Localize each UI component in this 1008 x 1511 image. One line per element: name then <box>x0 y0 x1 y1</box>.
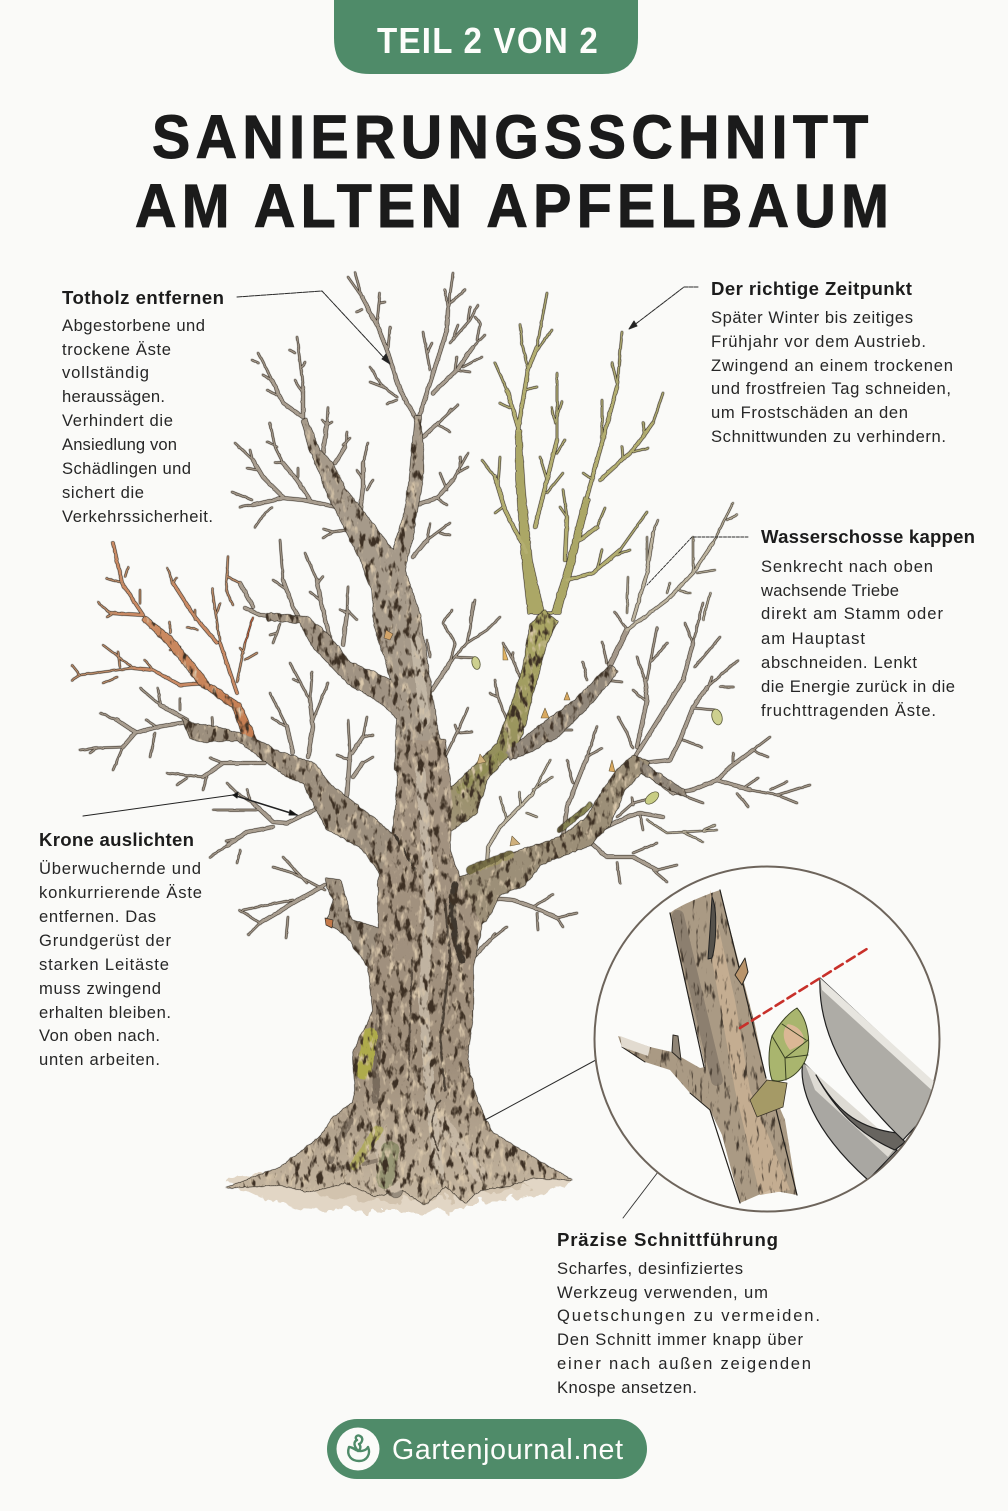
callout: Totholz entfernen: heraussägen. <box>62 387 165 406</box>
inset circle: precise cut detail <box>594 866 945 1212</box>
title <box>135 102 889 240</box>
callout: Wasserschosse kappen: abschneiden. Lenkt <box>761 653 917 672</box>
trunk highlights and crevices <box>330 640 590 1190</box>
callout: Krone auslichten: Überwuchernde und <box>39 859 201 878</box>
leader line: inset to trunk <box>485 1047 620 1120</box>
callout: Der richtige Zeitpunkt: Frühjahr vor dem Austrieb. <box>711 332 926 351</box>
trunk <box>225 740 572 1205</box>
grey crown branches <box>80 273 810 960</box>
callout: Totholz entfernen: Verkehrssicherheit. <box>62 507 213 526</box>
callout: Totholz entfernen: Schädlingen und <box>62 459 191 478</box>
callout: Totholz entfernen: trockene Äste <box>62 340 171 359</box>
leader line: Schnittführung <box>623 1172 658 1218</box>
callout: Totholz entfernen: Verhindert die <box>62 411 173 430</box>
orange main limb <box>142 616 258 746</box>
pale dying branches <box>487 503 737 867</box>
callout: Präzise Schnittführung: Knospe ansetzen. <box>557 1378 697 1397</box>
callout: Präzise Schnittführung: einer nach außen zeigenden <box>557 1354 811 1373</box>
callout: Krone auslichten: entfernen. Das <box>39 907 156 926</box>
inset pale twig end <box>620 1036 650 1056</box>
callout: Totholz entfernen: Totholz entfernen <box>62 287 224 308</box>
callout: Wasserschosse kappen: Senkrecht nach oben <box>761 557 933 576</box>
callout: Präzise Schnittführung: Quetschungen zu vermeiden. <box>557 1306 820 1325</box>
callout: Wasserschosse kappen: am Hauptast <box>761 629 865 648</box>
callout: Der richtige Zeitpunkt <box>711 278 953 446</box>
callout: Der richtige Zeitpunkt: Der richtige Zeitpunkt <box>711 278 912 299</box>
callout: Wasserschosse kappen: wachsende Triebe <box>760 581 899 600</box>
callout: Totholz entfernen <box>62 287 224 526</box>
footer pill: brand: Gartenjournal.net <box>392 1434 623 1466</box>
callout: Präzise Schnittführung: Präzise Schnittführung <box>557 1229 778 1250</box>
callout: Der richtige Zeitpunkt: und frostfreien Tag schneiden, <box>711 379 951 398</box>
inset blades <box>802 978 945 1180</box>
inset bud stalk <box>750 1080 787 1117</box>
callout: Krone auslichten: starken Leitäste <box>39 955 169 974</box>
callout: Totholz entfernen: Abgestorbene und <box>62 316 205 335</box>
callout: Totholz entfernen: Ansiedlung von <box>62 435 177 454</box>
callout: Totholz entfernen: vollständig <box>62 363 149 382</box>
callout: Wasserschosse kappen: Wasserschosse kappen <box>761 526 975 547</box>
main limbs left <box>182 718 400 890</box>
inset side spur <box>735 958 748 985</box>
main limb right <box>445 755 650 940</box>
water shoots: olive <box>482 293 663 614</box>
inset green bud <box>769 1008 809 1081</box>
upper stems <box>301 416 445 770</box>
inset bud scar <box>708 897 716 959</box>
footer pill: brand <box>327 1419 647 1479</box>
top tab: part label <box>334 0 638 74</box>
leader line: Zeitpunkt <box>629 287 698 329</box>
callout: Krone auslichten: Grundgerüst der <box>39 931 171 950</box>
icon: sprout in pot <box>336 1428 380 1470</box>
callout: Krone auslichten: unten arbeiten. <box>39 1050 160 1069</box>
leaves and buds <box>384 630 724 846</box>
callout: Der richtige Zeitpunkt: um Frostschäden an den <box>711 403 908 422</box>
callout: Präzise Schnittführung: Den Schnitt immer knapp über <box>557 1330 803 1349</box>
tree body: trunk and main limbs <box>142 416 686 1205</box>
title: AM ALTEN APFELBAUM <box>135 171 889 240</box>
callout: Der richtige Zeitpunkt: Zwingend an einem trockenen <box>711 356 953 375</box>
dead wood: orange branch <box>72 543 257 693</box>
callout: Präzise Schnittführung: Scharfes, desinfiziertes <box>557 1259 743 1278</box>
cut stub <box>325 918 333 928</box>
callout: Krone auslichten: Krone auslichten <box>39 829 194 850</box>
olive main limb <box>445 610 558 835</box>
callout: Der richtige Zeitpunkt: Später Winter bis zeitiges <box>711 308 913 327</box>
callout: Krone auslichten: Von oben nach. <box>39 1026 160 1045</box>
low stub limb <box>325 878 385 975</box>
leader line: Krone <box>83 792 297 816</box>
callout: Totholz entfernen: sichert die <box>62 483 144 502</box>
illustrated apple tree: crown twigs <box>72 273 810 960</box>
soil at tree base <box>226 1165 572 1212</box>
inset dashed cut line <box>740 947 870 1028</box>
leader line: Totholz <box>237 291 390 364</box>
title: SANIERUNGSSCHNITT <box>152 102 868 171</box>
top tab: part label: TEIL 2 VON 2 <box>377 22 598 61</box>
inset twig <box>618 890 797 1203</box>
callout: Krone auslichten <box>39 829 202 1069</box>
callout: Krone auslichten: muss zwingend <box>39 979 161 998</box>
callout: Präzise Schnittführung <box>557 1229 820 1397</box>
callout: Wasserschosse kappen: die Energie zurück in die <box>761 677 955 696</box>
callout: Krone auslichten: konkurrierende Äste <box>39 883 202 902</box>
callout: Wasserschosse kappen: direkt am Stamm oder <box>761 604 943 623</box>
callout: Wasserschosse kappen <box>760 526 975 720</box>
callout: Präzise Schnittführung: Werkzeug verwenden, um <box>557 1283 768 1302</box>
callout: Der richtige Zeitpunkt: Schnittwunden zu verhindern. <box>711 427 946 446</box>
callout: Wasserschosse kappen: fruchttragenden Äste. <box>761 701 936 720</box>
callout: Krone auslichten: erhalten bleiben. <box>39 1003 171 1022</box>
leader line: Wasserschosse <box>647 537 748 585</box>
